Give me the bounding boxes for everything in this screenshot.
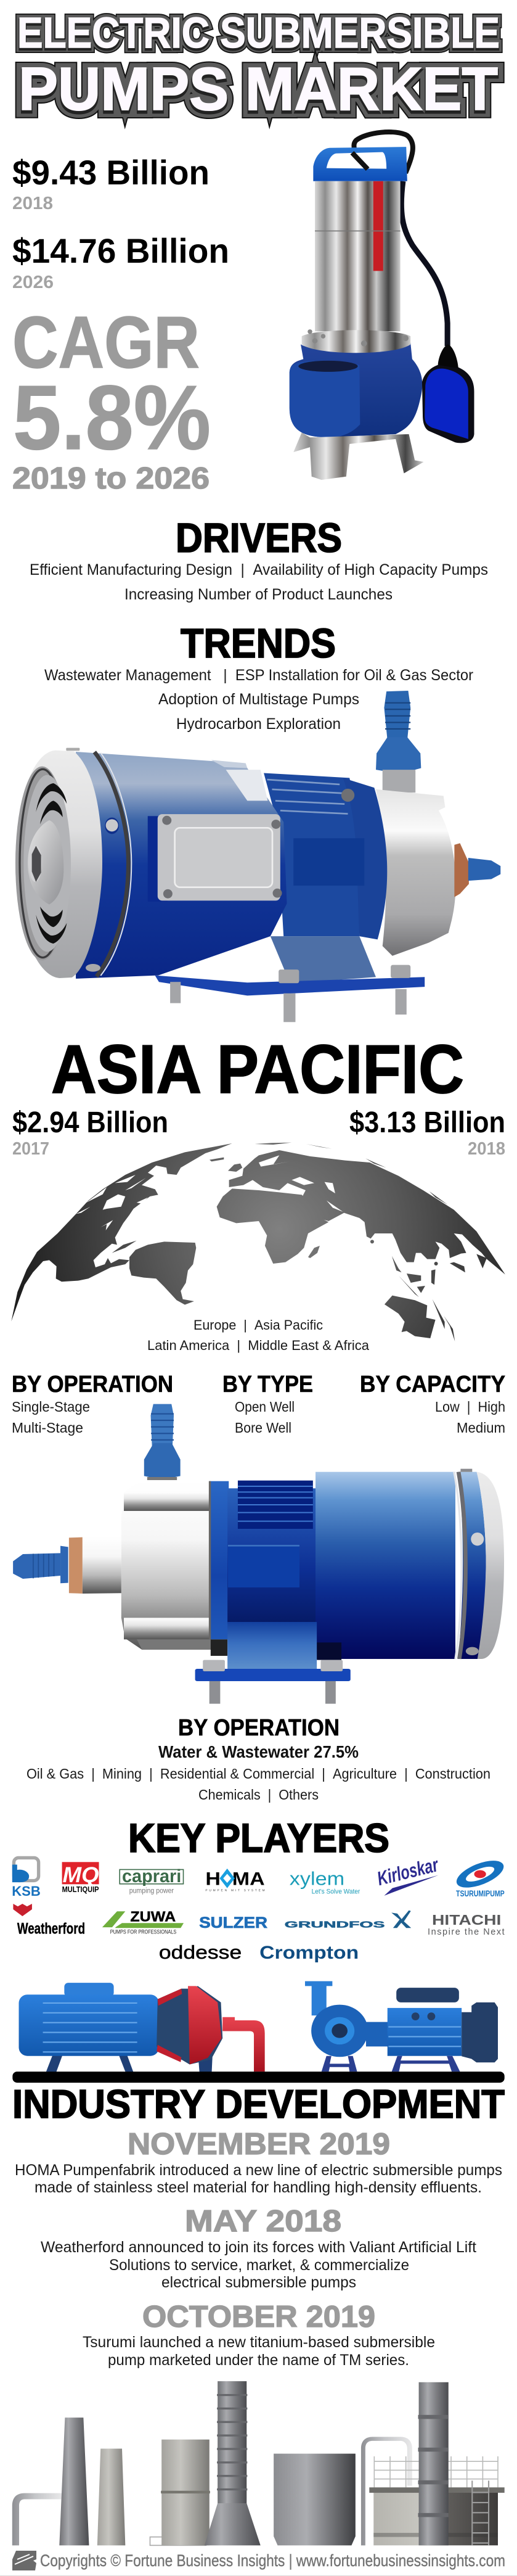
- logo: HOMA: PUMPEN MIT SYSTEM: [205, 1888, 265, 1892]
- title: PUMPS MARKET: [18, 56, 498, 124]
- logo: Multiquip: MULTIQUIP: [62, 1885, 99, 1894]
- text: trends list: [44, 667, 473, 733]
- stat: CAGR: 5.8%: [13, 367, 211, 469]
- segment: by operation: Multi-Stage: [12, 1420, 83, 1436]
- development: May 2018: Solutions to service, market, & commercialize: [109, 2257, 409, 2274]
- logo: KSB: KSB: [12, 1883, 41, 1899]
- right flat pump: [305, 1981, 498, 2072]
- stat: 2018 market value: [12, 153, 210, 213]
- text: drivers list: Efficient Manufacturing Design | Availability of High Capacity Pumps: [30, 561, 488, 578]
- stat: Asia Pacific 2018: [349, 1106, 505, 1159]
- development: October 2019: [83, 2300, 435, 2369]
- logo: Grundfos: [285, 1911, 411, 1930]
- segment: by capacity: Low | High: [435, 1399, 505, 1415]
- segment: by type: [222, 1372, 313, 1436]
- image: mirrored pump motor: [13, 1404, 504, 1704]
- logo: Kirloskar: Kirloskar: [375, 1853, 441, 1890]
- logo: Zuwa: PUMPS FOR PROFESSIONALS: [110, 1929, 176, 1935]
- logo: Hitachi: HITACHI: [432, 1912, 501, 1928]
- stat: Asia Pacific 2017: $2.94 Billion: [12, 1106, 168, 1139]
- logo: Crompton: Crompton: [259, 1943, 359, 1963]
- development: November 2019: HOMA Pumpenfabrik introduced a new line of electric submersible pumps: [15, 2162, 502, 2179]
- left flat pump: [19, 1983, 265, 2073]
- logo: Xylem: [290, 1868, 360, 1896]
- tank and tall stack: [150, 2381, 261, 2545]
- logo: Caprari: [120, 1866, 184, 1895]
- text: applications list: Chemicals | Others: [198, 1787, 319, 1803]
- heading: Asia Pacific: ASIA PACIFIC: [51, 1031, 464, 1108]
- logo: Grundfos: GRUNDFOS: [285, 1920, 385, 1930]
- development: October 2019: OCTOBER 2019: [142, 2300, 375, 2334]
- logo: KSB: [12, 1858, 41, 1899]
- stat: CAGR: CAGR: [12, 302, 200, 384]
- text: drivers list: Increasing Number of Product Launches: [124, 586, 393, 603]
- chimneys and pipe: [12, 2418, 125, 2545]
- logo: Sulzer: SULZER: [199, 1914, 267, 1932]
- development: October 2019: pump marketed under the name of TM series.: [108, 2352, 409, 2369]
- logos: key players: [12, 1853, 507, 1963]
- footer: [12, 2551, 505, 2570]
- text: trends list: Hydrocarbon Exploration: [176, 715, 341, 733]
- stat: 2018 market value: $9.43 Billion: [12, 153, 210, 192]
- text: regions list: Europe | Asia Pacific: [193, 1317, 323, 1333]
- title: PUMPS MARKET: [18, 57, 498, 125]
- logo: Hitachi: Inspire the Next: [428, 1927, 505, 1937]
- illustration: industrial plant: [12, 2381, 505, 2545]
- logo: Xylem: Let's Solve Water: [312, 1888, 360, 1896]
- large tank: [274, 2454, 356, 2545]
- heading: trends: TRENDS: [181, 620, 336, 667]
- development: May 2018: electrical submersible pumps: [161, 2274, 356, 2291]
- logo: HOMA: H MA: [205, 1869, 265, 1889]
- platform with stack and ladder: [361, 2382, 505, 2545]
- stat: Asia Pacific 2017: 2017: [12, 1139, 49, 1159]
- footer logo: [12, 2551, 36, 2570]
- segment: by capacity: Medium: [457, 1420, 505, 1436]
- logo: Weatherford: Weatherford: [17, 1920, 85, 1938]
- segment: by capacity: [360, 1372, 505, 1436]
- title: PUMPS MARKET: [18, 56, 498, 124]
- heading: by application: BY OPERATION: [178, 1715, 340, 1741]
- logo: Weatherford: [13, 1904, 85, 1938]
- development: May 2018: Weatherford announced to join its forces with Valiant Artificial Lift: [41, 2239, 476, 2256]
- logo: Caprari: caprari: [122, 1866, 181, 1887]
- title: [17, 9, 500, 125]
- logo: Zuwa: [102, 1909, 184, 1935]
- logo: Kirloskar: [375, 1853, 441, 1896]
- logo: Multiquip: MQ: [63, 1863, 99, 1887]
- text: regions list: [147, 1317, 370, 1353]
- segment: by type: BY TYPE: [222, 1372, 313, 1397]
- development: November 2019: NOVEMBER 2019: [128, 2128, 390, 2161]
- heading: key players: KEY PLAYERS: [128, 1815, 389, 1861]
- logo: Hitachi: [428, 1912, 505, 1937]
- black base: [12, 2072, 505, 2083]
- image: submersible pump: [290, 132, 474, 480]
- segment: by operation: Single-Stage: [12, 1399, 90, 1415]
- text: trends list: Adoption of Multistage Pumps: [158, 691, 359, 708]
- development: November 2019: [15, 2128, 502, 2196]
- stat: Asia Pacific 2018: $3.13 Billion: [349, 1106, 505, 1139]
- segment: by capacity: BY CAPACITY: [360, 1372, 505, 1397]
- text: largest application: Water & Wastewater 27.5%: [158, 1742, 359, 1761]
- stat: 2018 market value: 2018: [12, 194, 53, 213]
- stat: CAGR: 2019 to 2026: [12, 462, 210, 495]
- development: November 2019: made of stainless steel material for handling high-density effluents.: [35, 2179, 482, 2196]
- logo: Caprari: pumping power: [129, 1887, 174, 1895]
- text: trends list: Wastewater Management | ESP Installation for Oil & Gas Sector: [44, 667, 473, 684]
- development: May 2018: [41, 2205, 476, 2291]
- world map: [11, 1143, 505, 1341]
- segment: by operation: [12, 1372, 173, 1436]
- development: May 2018: MAY 2018: [185, 2205, 341, 2238]
- stat: 2026 market value: $14.76 Billion: [12, 231, 229, 270]
- segment: by type: Bore Well: [235, 1420, 291, 1436]
- stat: CAGR: [12, 302, 211, 495]
- stat: 2026 market value: 2026: [12, 273, 54, 292]
- stat: 2026 market value: [12, 231, 229, 292]
- stat: Asia Pacific 2017: [12, 1106, 168, 1159]
- image: horizontal pump motor: [15, 691, 500, 1022]
- text: applications list: [26, 1766, 491, 1803]
- text: drivers list: [30, 561, 488, 603]
- development: October 2019: Tsurumi launched a new titanium-based submersible: [83, 2334, 435, 2351]
- heading: drivers: DRIVERS: [176, 515, 342, 561]
- stat: Asia Pacific 2018: 2018: [468, 1139, 505, 1159]
- segment: by type: Open Well: [235, 1399, 295, 1415]
- text: applications list: Oil & Gas | Mining | Residential & Commercial | Agriculture | Construction: [26, 1766, 491, 1782]
- segment: by operation: BY OPERATION: [12, 1372, 173, 1397]
- logo: Oddesse: oddesse: [159, 1941, 242, 1963]
- illustration: flat pumps on a black base: [12, 1981, 505, 2083]
- logo: Xylem: xylem: [290, 1868, 344, 1889]
- logo: Zuwa: ZUWA: [130, 1909, 176, 1925]
- text: regions list: Latin America | Middle East & Africa: [147, 1338, 370, 1353]
- heading: industry development: INDUSTRY DEVELOPMENT: [12, 2081, 505, 2126]
- title: PUMPS MARKET: [18, 55, 498, 123]
- logo: Tsurumi Pump: [453, 1855, 507, 1898]
